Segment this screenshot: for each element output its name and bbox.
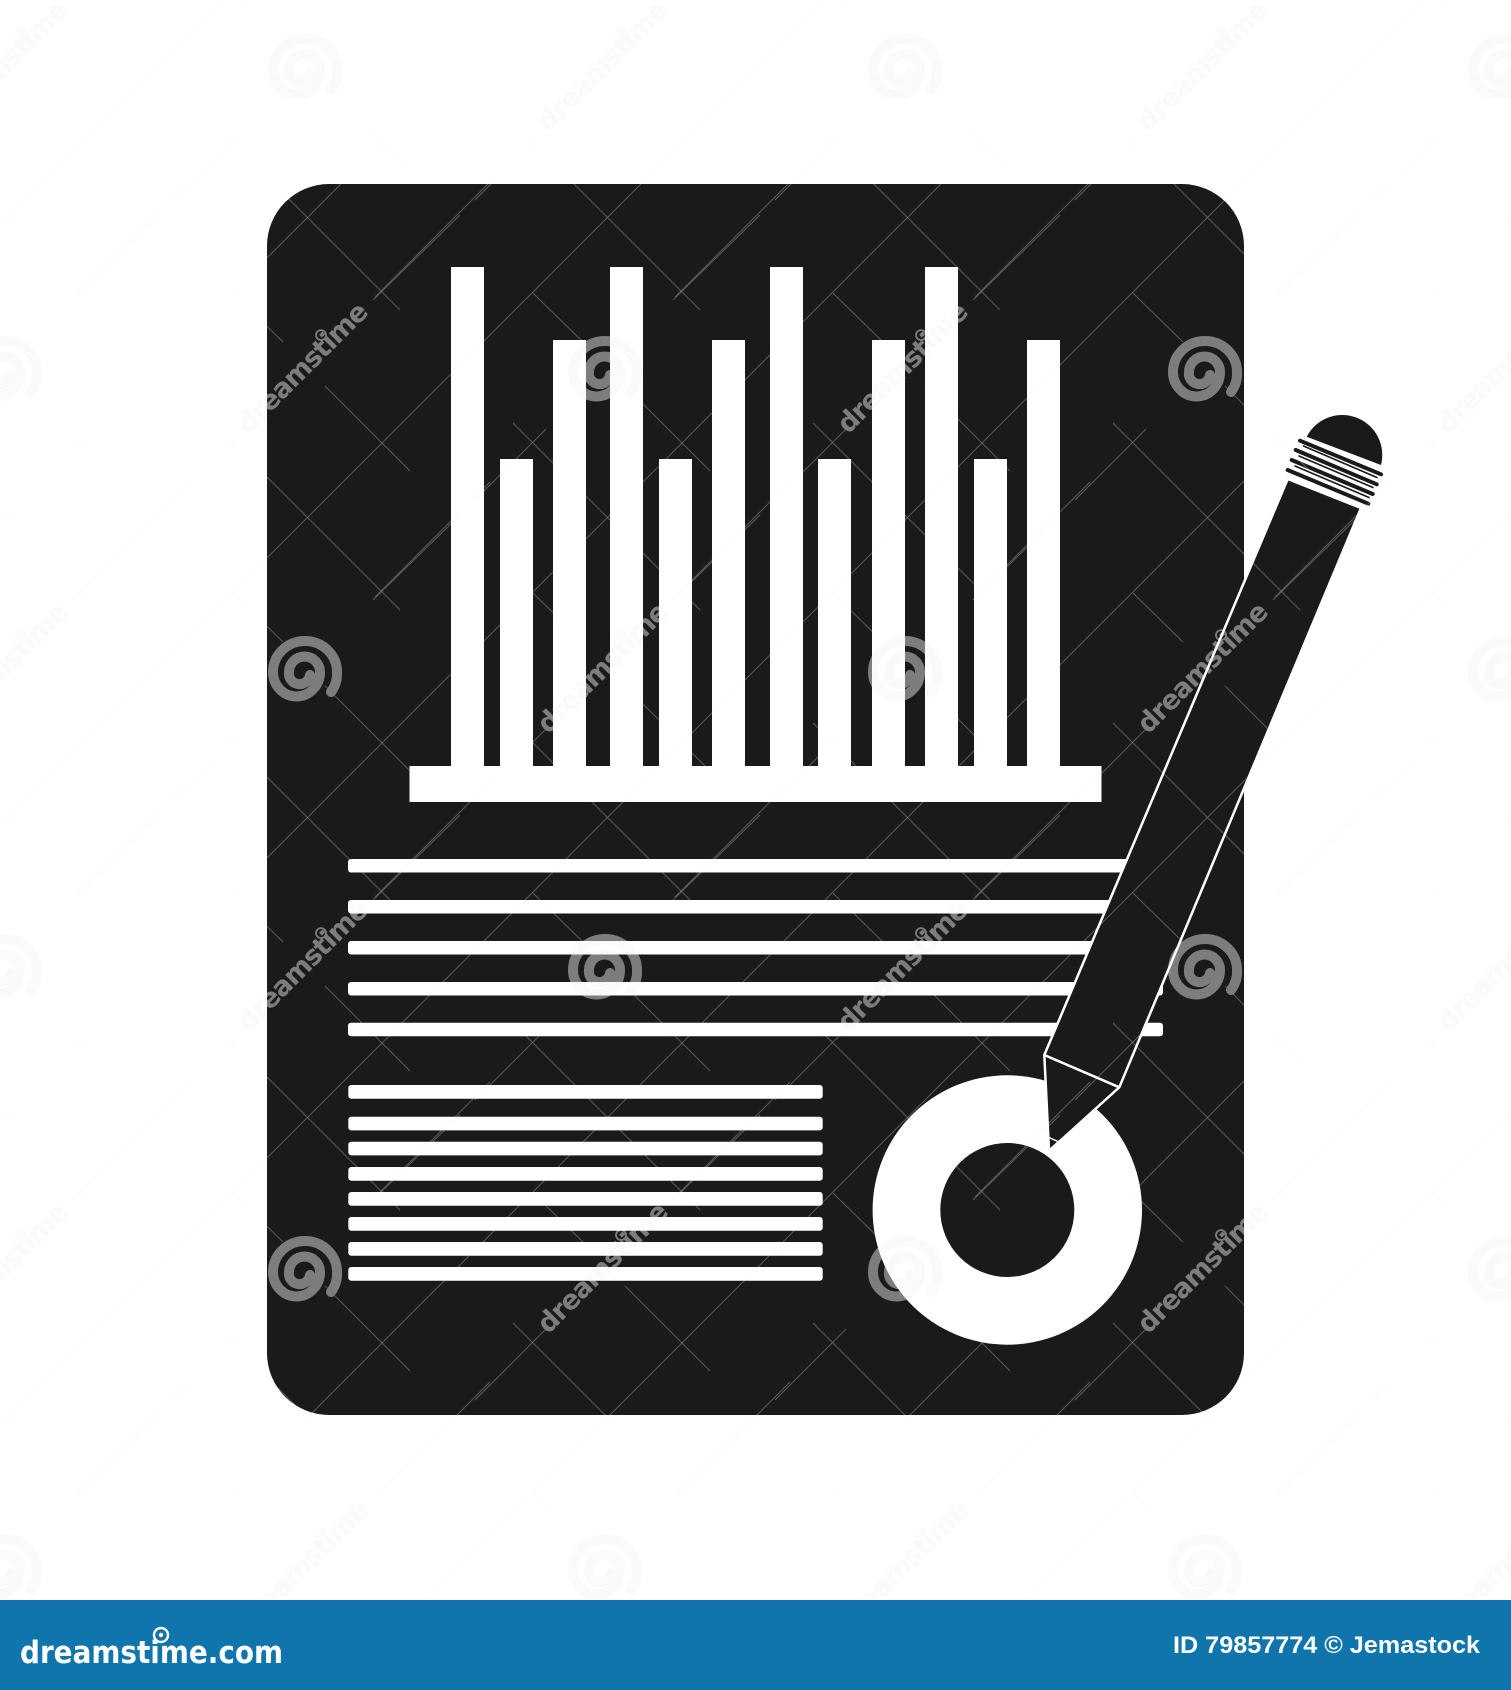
footer logo: dreamstime.com: dreamstime.com [20, 1635, 283, 1671]
panel: document sheet [267, 184, 1244, 1415]
icon: pencil [1044, 415, 1382, 1151]
watermark overlay: dreamstime [531, 1196, 675, 1340]
watermark overlay: dreamstime [231, 894, 375, 1038]
text block: long lines [348, 859, 1163, 1036]
text block: short lines [348, 1085, 823, 1281]
watermark overlay: dreamstime [531, 596, 675, 740]
bar chart [410, 267, 1102, 802]
donut chart [873, 1075, 1142, 1345]
watermark overlay: dreamstime [831, 894, 975, 1038]
footer bar [0, 1600, 1511, 1690]
watermark overlay: dreamstime [231, 1494, 375, 1638]
footer credit: ID 79857774 © Jemastock [1173, 1632, 1481, 1659]
watermark overlay: dreamstime [1131, 596, 1275, 740]
watermark overlay: dreamstime [231, 296, 375, 440]
watermark overlay: dreamstime [831, 1494, 975, 1638]
watermark overlay: dreamstime [1131, 1196, 1275, 1340]
watermark overlay: dreamstime [831, 296, 975, 440]
